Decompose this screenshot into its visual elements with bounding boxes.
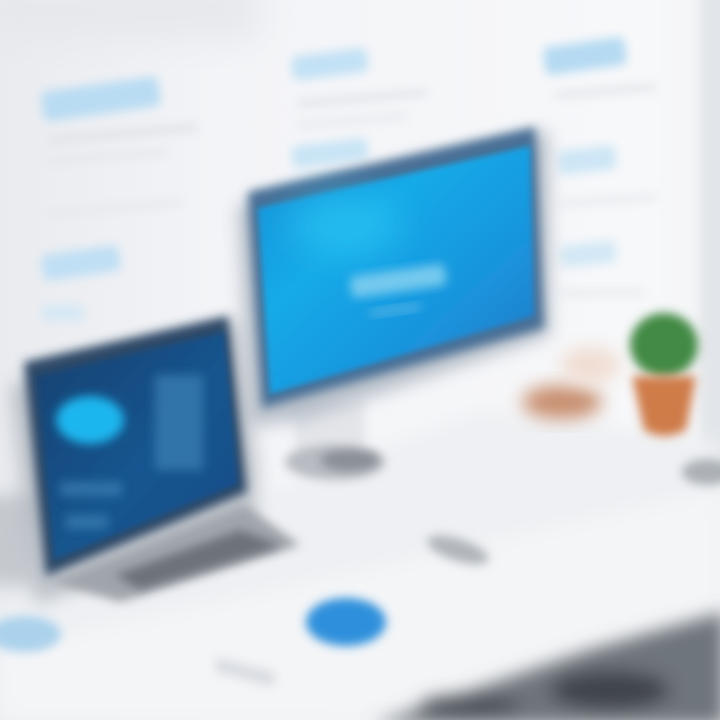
laptop keyboard (115, 530, 282, 590)
monitor screen (258, 146, 534, 394)
panel: wall chart right (542, 36, 655, 296)
monitor stand (285, 400, 385, 480)
laptop lid (24, 316, 247, 576)
laptop blue tile (56, 396, 124, 444)
desk gadgets (214, 459, 720, 687)
plant foliage (630, 313, 698, 377)
screen sub label (370, 303, 421, 317)
panel: wall chart centre (291, 47, 428, 169)
desk surface (0, 410, 720, 720)
pale object behind (560, 347, 620, 383)
monitor shadow (238, 130, 550, 425)
laptop shadow (10, 320, 258, 605)
blue paper tab (0, 616, 61, 652)
panel: wall chart left (40, 76, 198, 321)
screen highlight (290, 197, 400, 253)
plant pot (632, 376, 696, 436)
terracotta object (522, 385, 602, 419)
laptop screen (36, 332, 238, 560)
laptop (10, 316, 300, 605)
monitor (238, 127, 550, 425)
laptop data rows (60, 375, 203, 529)
plant (522, 313, 698, 436)
laptop base (52, 505, 300, 602)
monitor bezel (248, 127, 544, 408)
blue round badge (306, 598, 386, 646)
screen label (349, 263, 447, 298)
floor shadow (372, 612, 720, 720)
